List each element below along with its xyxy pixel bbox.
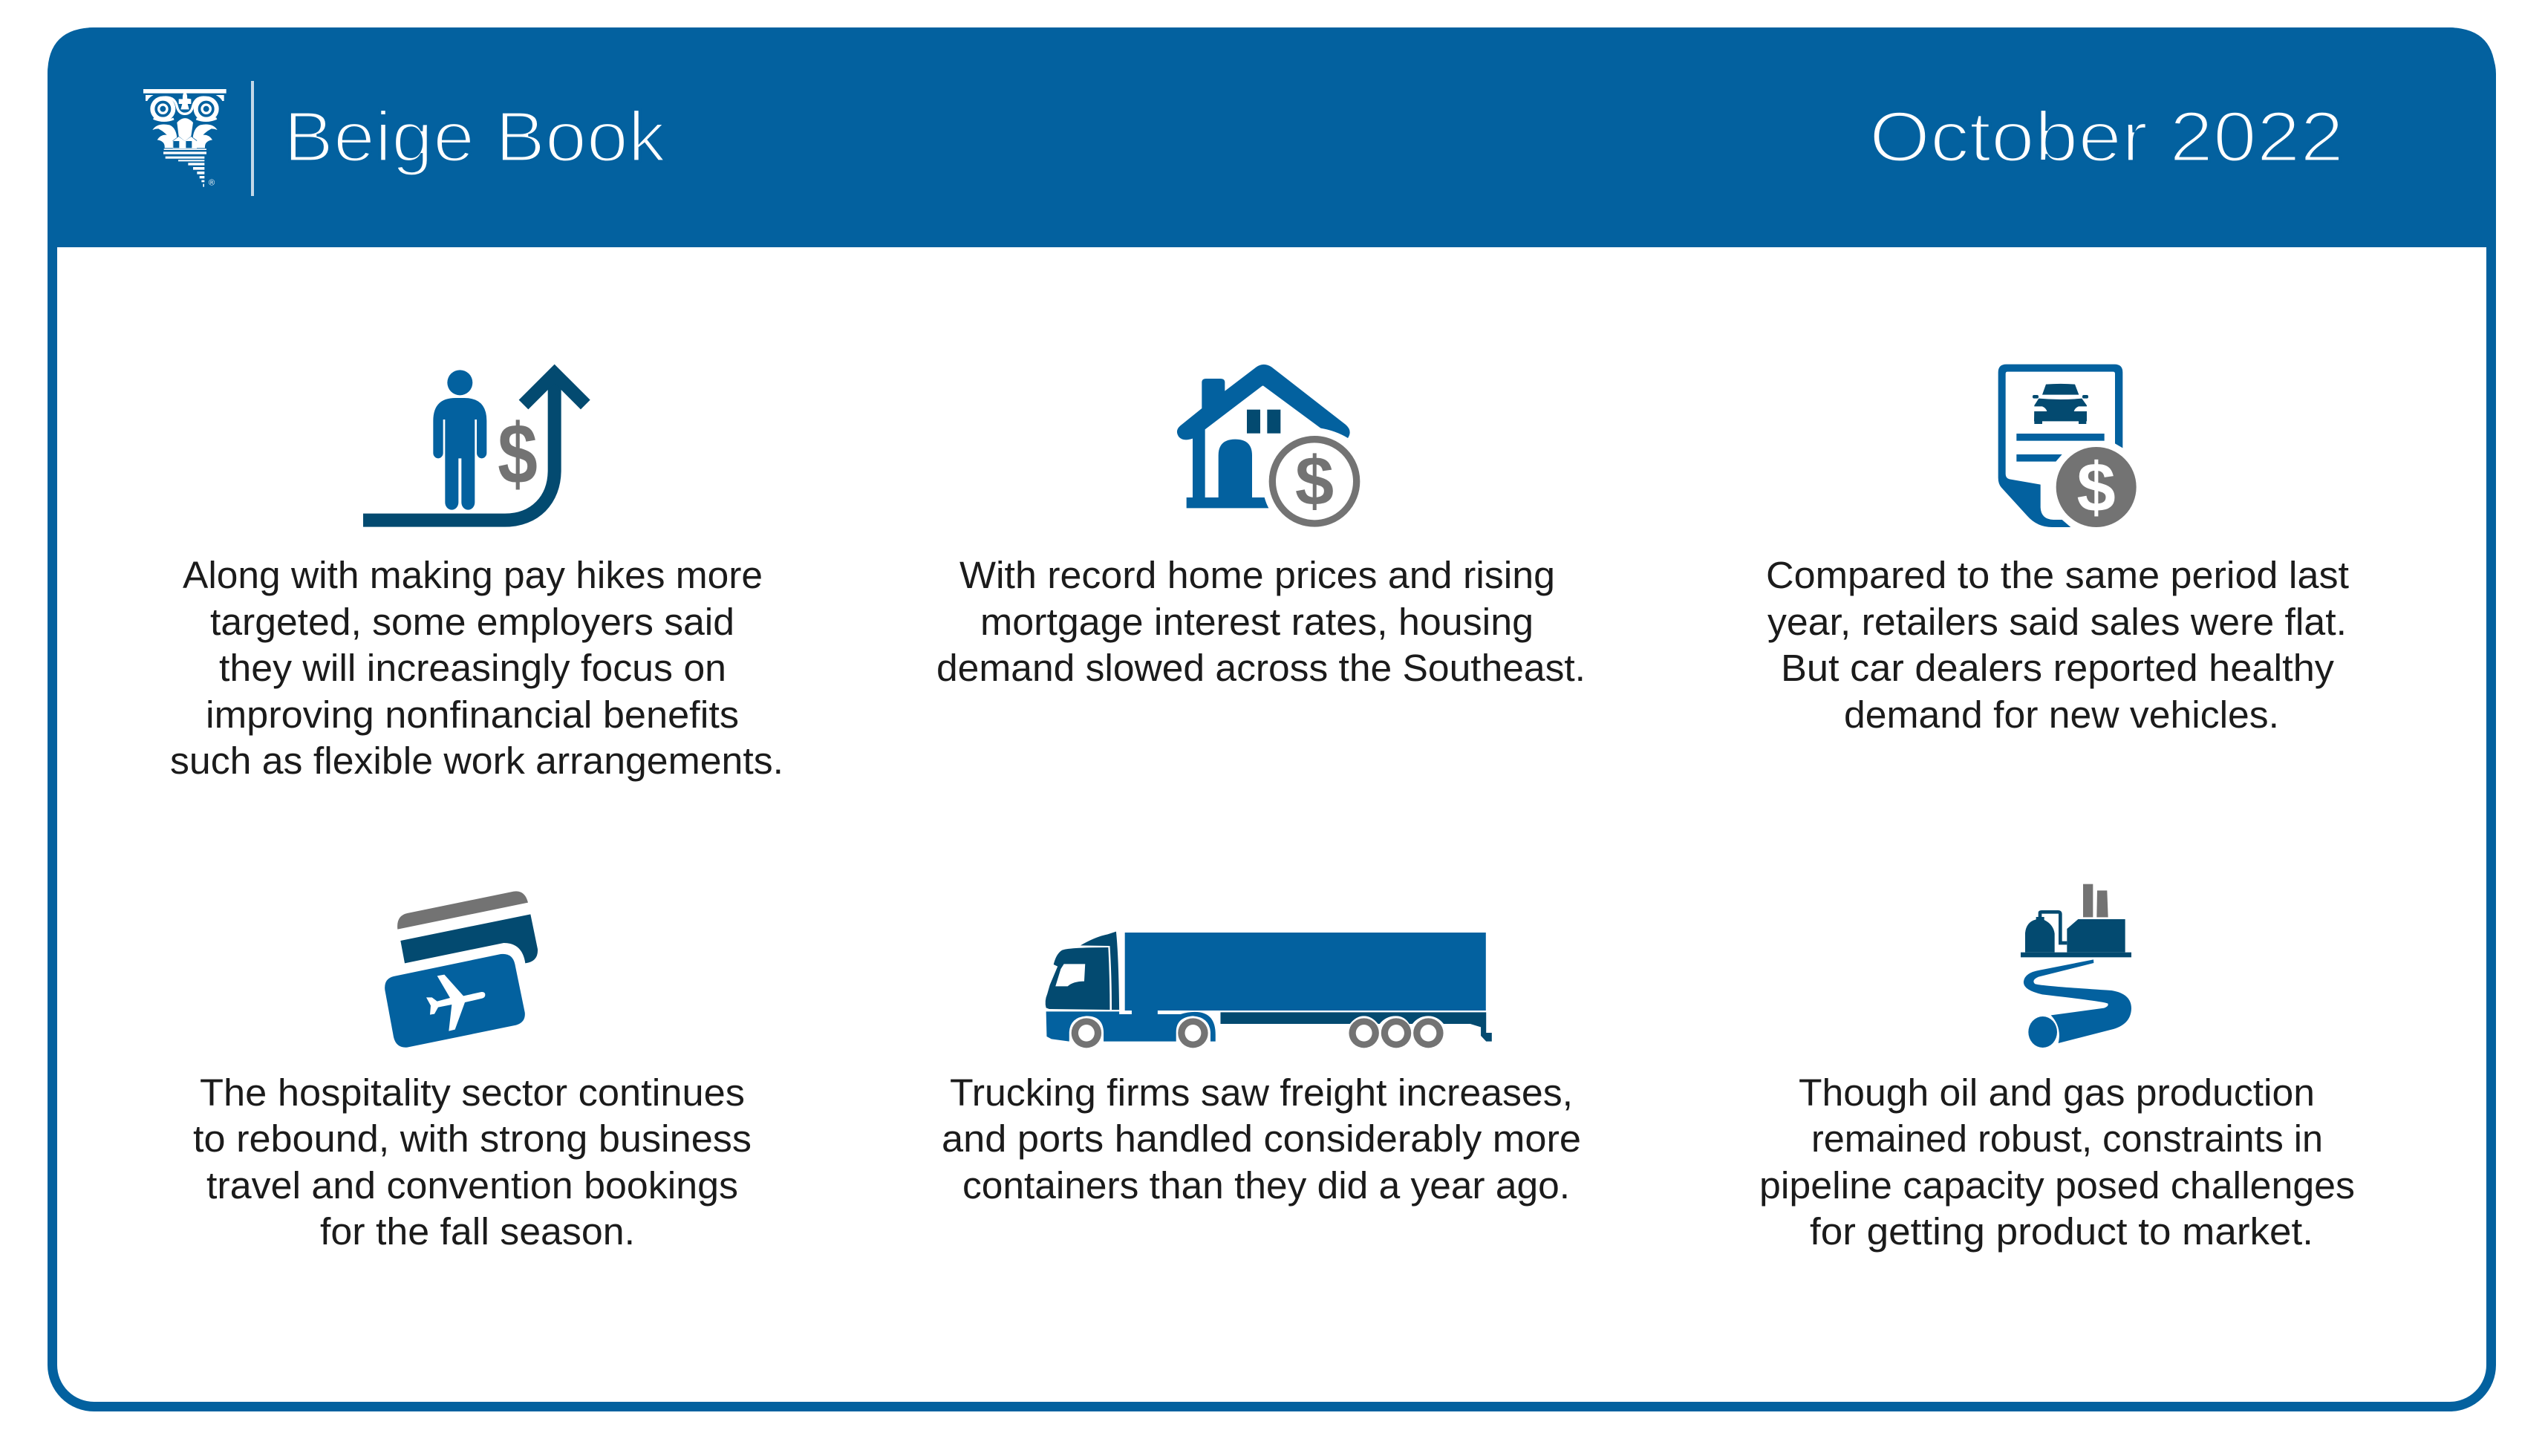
icon: car invoice with dollar: $ — [2077, 448, 2116, 526]
text: oil and gas: for getting product to market. — [1810, 1210, 2313, 1253]
title: Beige Book — [284, 97, 666, 177]
text: retail: demand for new vehicles. — [1844, 693, 2279, 736]
text: oil and gas — [1759, 1071, 2355, 1253]
text: housing: demand slowed across the Southeast. — [936, 647, 1586, 689]
text: hospitality: to rebound, with strong business — [193, 1117, 752, 1160]
text: pay hikes: such as flexible work arrangements. — [170, 740, 783, 782]
text: oil and gas: Though oil and gas production — [1799, 1071, 2315, 1114]
icon: person with rising pay arrow: $ — [498, 406, 538, 502]
text: hospitality: for the fall season. — [320, 1210, 635, 1253]
icon: semi truck — [1046, 932, 1492, 1048]
text: hospitality — [193, 1071, 752, 1253]
text: pay hikes: Along with making pay hikes more — [183, 554, 763, 596]
icon: house with dollar: $ — [1295, 442, 1334, 520]
icon: card and plane ticket — [385, 891, 538, 1048]
icon: refinery and pipeline — [2021, 884, 2131, 1048]
logo divider — [251, 81, 254, 196]
text: pay hikes: they will increasingly focus on — [219, 647, 726, 689]
text: trucking: and ports handled considerably more — [942, 1117, 1581, 1160]
text: trucking: containers than they did a year ago. — [962, 1164, 1570, 1207]
text: retail: year, retailers said sales were flat. — [1767, 601, 2347, 643]
logo: column capital — [143, 89, 227, 187]
text: oil and gas: pipeline capacity posed challenges — [1759, 1164, 2355, 1207]
text: trucking: Trucking firms saw freight increases, — [950, 1071, 1573, 1114]
text: retail — [1766, 554, 2349, 736]
text: trucking — [942, 1071, 1581, 1207]
text: pay hikes: targeted, some employers said — [210, 601, 734, 643]
date: October 2022 — [1869, 97, 2344, 177]
header band — [48, 27, 2495, 247]
text: housing: mortgage interest rates, housing — [980, 601, 1534, 643]
text: housing — [936, 554, 1586, 689]
text: hospitality: The hospitality sector continues — [200, 1071, 745, 1114]
text: retail: But car dealers reported healthy — [1781, 647, 2335, 689]
text: retail: Compared to the same period last — [1766, 554, 2349, 596]
logo: column capital: ® — [209, 178, 215, 187]
text: oil and gas: remained robust, constraints in — [1811, 1117, 2323, 1160]
text: pay hikes: improving nonfinancial benefits — [206, 693, 739, 736]
text: pay hikes — [170, 554, 783, 782]
text: housing: With record home prices and rising — [959, 554, 1555, 596]
icon: house with dollar — [1177, 365, 1357, 523]
icon: person with rising pay arrow — [363, 370, 585, 520]
text: hospitality: travel and convention bookings — [206, 1164, 738, 1207]
icon: car invoice with dollar — [1998, 365, 2137, 527]
